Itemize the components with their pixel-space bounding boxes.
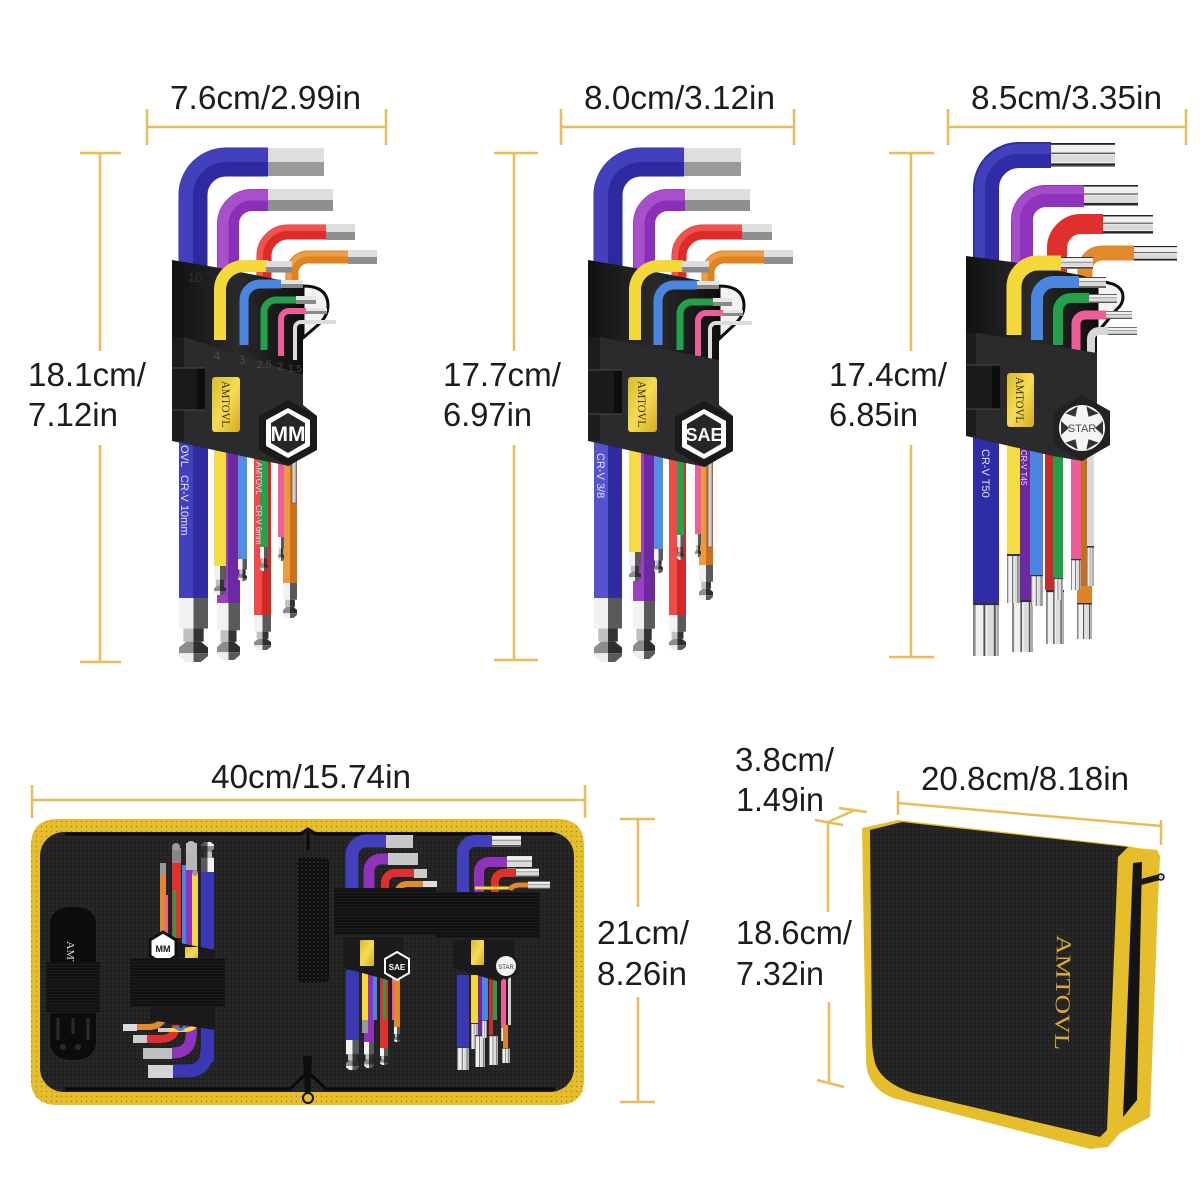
- dimension: closed case width: [898, 760, 1161, 845]
- panel: closed case: [862, 820, 1164, 1149]
- holder back: [588, 260, 744, 362]
- case lining: [40, 832, 574, 1092]
- dimension: closed case thickness: 3.8cm/: [735, 741, 835, 778]
- dimension: closed case width: 20.8cm/8.18in: [921, 760, 1129, 797]
- short keys upper: [220, 261, 336, 360]
- case yellow edge: [862, 820, 1160, 1149]
- key lettering: CR-V T50: [979, 449, 991, 498]
- key lettering: OVL: [178, 445, 190, 467]
- dimension: SAE set width: 8.0cm/3.12in: [584, 79, 775, 116]
- dimension: MM set height: [28, 153, 147, 662]
- long keys upper: [186, 148, 377, 350]
- size numbers: 1.5: [288, 364, 302, 375]
- long keys upper: [601, 148, 793, 350]
- dimension: closed case height: 18.6cm/: [736, 914, 853, 951]
- dimension: star set height: 6.85in: [829, 396, 918, 433]
- hex badge MM: MM: [270, 423, 306, 446]
- dimension: open case width: [32, 758, 585, 818]
- holder front plate: [172, 337, 317, 466]
- front cover: [870, 822, 1128, 1137]
- holder back: [172, 260, 328, 375]
- panel: star key set: [966, 143, 1177, 656]
- long keys upper: [980, 143, 1177, 350]
- panel: SAE hex key set: [588, 148, 793, 662]
- tool handle: AMTOV: [64, 941, 76, 984]
- dimension: SAE set width: [561, 79, 794, 145]
- brand badge: [628, 377, 657, 432]
- short keys upper: [1014, 257, 1137, 353]
- MM set in case: [123, 841, 215, 1078]
- key lettering: [979, 449, 1028, 498]
- dimension: star set width: 8.5cm/3.35in: [971, 79, 1162, 116]
- hex badge SAE: SAE: [685, 425, 723, 445]
- key lettering: CR-V 3/8: [594, 453, 606, 498]
- long keys lower: [594, 440, 713, 662]
- dimension: open case height: 8.26in: [597, 955, 687, 992]
- key lettering: [178, 445, 263, 545]
- dimension: star set height: 17.4cm/: [829, 356, 948, 393]
- dimension: open case width: 40cm/15.74in: [211, 758, 411, 795]
- key lettering: CR-V 6mm: [254, 505, 263, 545]
- brand badge: [1007, 373, 1034, 427]
- dimension: MM set width: 7.6cm/2.99in: [170, 79, 361, 116]
- size numbers: 2.5: [256, 359, 272, 371]
- key lettering: CR-V T45: [1019, 450, 1028, 486]
- side gusset: [1123, 862, 1142, 1117]
- zipper pull: [1137, 874, 1164, 883]
- holder back: [966, 256, 1123, 355]
- hex badge SAE: [675, 401, 733, 467]
- star set in case: STAR: [498, 965, 514, 971]
- dimension: MM set width: [147, 79, 386, 145]
- SAE set in case: [344, 835, 437, 1070]
- mesh pocket: [297, 857, 329, 983]
- holder front plate: [588, 337, 733, 467]
- zipper seams: [65, 829, 555, 1089]
- dimension: closed case thickness: [735, 741, 867, 822]
- dimension: star set width: [948, 79, 1186, 145]
- elastic strap: SAE: [334, 888, 436, 935]
- hex badge star: STAR: [1068, 423, 1096, 435]
- dimension: open case height: [597, 819, 690, 1102]
- key lettering: CR-V 10mm: [178, 475, 190, 536]
- dimension: MM set height: 7.12in: [28, 396, 118, 433]
- dimension: closed case thickness: 1.49in: [736, 781, 824, 818]
- tool handle: [50, 907, 96, 1060]
- brand badge: AMTOVL: [1013, 377, 1027, 423]
- brand badge: [212, 377, 240, 432]
- hex badge MM: [259, 400, 317, 466]
- hex badge star: [1054, 395, 1110, 461]
- dimension: SAE set height: 6.97in: [443, 396, 532, 433]
- brand lettering: AMTOVL: [1050, 935, 1076, 1050]
- dimension: open case height: 21cm/: [597, 914, 690, 951]
- brand badge: AMTOVL: [219, 381, 233, 427]
- elastic strap: MM: [130, 958, 225, 1007]
- elastic strap: handle: [46, 962, 100, 1013]
- panel: MM hex key set: [172, 148, 377, 662]
- elastic strap: star: [436, 892, 540, 938]
- holder front plate: [966, 333, 1110, 461]
- SAE set in case: SAE: [389, 963, 406, 972]
- hinge: [966, 333, 1000, 436]
- panel: open case: [31, 819, 584, 1105]
- long keys lower: [179, 440, 297, 662]
- dimension: closed case height: 7.32in: [736, 955, 824, 992]
- dimension: star set height: [829, 153, 948, 657]
- zipper pull: [303, 1056, 313, 1103]
- brand badge: AMTOVL: [635, 381, 649, 427]
- dimension: SAE set height: 17.7cm/: [443, 356, 562, 393]
- long keys lower: [973, 430, 1094, 656]
- size numbers: 10: [188, 270, 202, 285]
- size numbers: [188, 270, 302, 375]
- key lettering: AMTOVL: [254, 462, 263, 495]
- dimension: closed case height: [736, 820, 853, 1087]
- short keys upper: [635, 261, 752, 362]
- dimension: SAE set height: [443, 153, 562, 660]
- hinge: [172, 337, 205, 441]
- MM set in case: MM: [156, 944, 170, 954]
- size numbers: 3: [239, 353, 246, 367]
- case yellow binding: [31, 819, 584, 1105]
- star set in case: [453, 835, 550, 1070]
- size numbers: 4: [214, 349, 221, 363]
- size numbers: 2: [277, 361, 283, 373]
- dimension: MM set height: 18.1cm/: [28, 356, 147, 393]
- hinge: [588, 337, 622, 441]
